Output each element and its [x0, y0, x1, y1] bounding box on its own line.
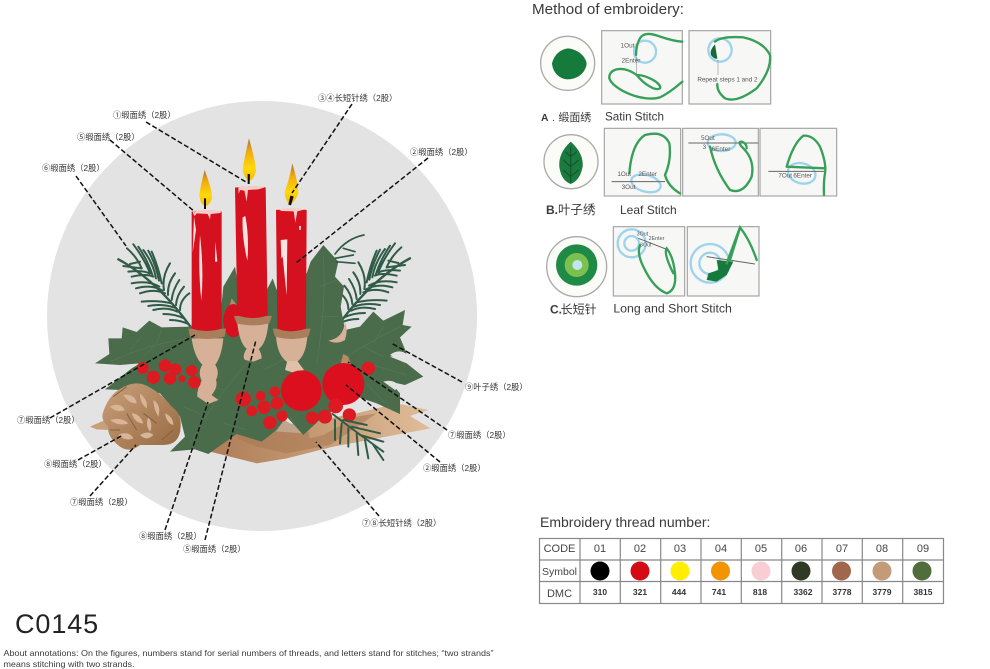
stitch callout labels: ②缎面绣（2股）: [410, 147, 473, 157]
label: satin stitch: Satin Stitch: [605, 111, 664, 124]
candle holder: center: [234, 316, 272, 362]
thread colour table: 3779: [873, 587, 892, 597]
step: long and short stitch 1: 3Out: [637, 231, 649, 237]
label: long and short stitch: [550, 301, 732, 316]
leader lines: [50, 104, 462, 540]
panel: stitch methods A and B: [541, 31, 837, 196]
thread colour table: 741: [712, 587, 726, 597]
step: leaf stitch 1: 3Out: [622, 184, 636, 191]
stitch callout labels: ⑧缎面绣（2股）: [44, 459, 107, 469]
sample: long and short stitch: [547, 237, 607, 297]
step: satin stitch 2: [689, 31, 771, 104]
label: leaf stitch: Leaf Stitch: [620, 203, 677, 217]
thread colour table: 05: [755, 543, 767, 555]
flames and wicks: [199, 138, 298, 209]
thread colour table: 321: [633, 587, 647, 597]
thread colour table: 03: [674, 543, 686, 555]
tan paper base: [90, 403, 431, 463]
stitch callout labels: ⑧缎面绣（2股）: [139, 531, 202, 541]
step: long and short stitch 1: [613, 227, 685, 296]
tan leaf curl: [328, 322, 347, 343]
step: long and short stitch 1: 2Enter: [649, 236, 665, 242]
step: long and short stitch 1: 3Out: [640, 243, 652, 249]
thread colour table: [540, 538, 944, 604]
step: leaf stitch 3: 7Out: [778, 172, 792, 179]
main holly leaves: [95, 245, 423, 454]
step: leaf stitch 3: 6Enter: [793, 172, 812, 179]
label: long and short stitch: Long and Short Stitch: [613, 302, 732, 316]
stitch callout labels: ③④长短针绣（2股）: [318, 93, 397, 103]
step: leaf stitch 3: [760, 128, 837, 196]
label: satin stitch: .: [552, 113, 555, 124]
label: leaf stitch: 叶子绣: [558, 202, 596, 217]
sample: leaf stitch: [544, 135, 598, 189]
stitch callout labels: ⑤缎面绣（2股）: [77, 132, 140, 142]
label: long and short stitch: 长短针: [561, 301, 597, 316]
stitch callout labels: ⑨叶子绣（2股）: [465, 382, 528, 392]
step: leaf stitch 2: 3: [703, 144, 707, 151]
stitch callout labels: ⑦缎面绣（2股）: [70, 497, 133, 507]
label: long and short stitch: C.: [550, 302, 562, 316]
label: satin stitch: [541, 110, 664, 124]
thread colour table: CODE: [544, 543, 575, 555]
step: leaf stitch 1: 1Out: [617, 171, 631, 178]
label: satin stitch: A: [541, 113, 549, 124]
note about annotations: [4, 648, 494, 669]
candle holder: left: [188, 329, 226, 404]
pine cone: [102, 383, 181, 450]
candle holder: right: [273, 329, 311, 373]
stitch callout labels: ②缎面绣（2股）: [423, 463, 486, 473]
thread colour table: 444: [672, 587, 686, 597]
product code: C0145: [15, 609, 99, 639]
thread colour table: 02: [634, 543, 646, 555]
note about annotations: means stitching with two strands.: [4, 659, 134, 669]
label: leaf stitch: [546, 202, 677, 217]
label: leaf stitch: B.: [546, 203, 558, 217]
step: satin stitch 1: [602, 31, 682, 104]
thread colour table: 01: [594, 543, 606, 555]
heading: thread number: Embroidery thread number:: [540, 514, 710, 530]
stitch callout labels: ⑦缎面绣（2股）: [448, 430, 511, 440]
sample: satin stitch: [541, 36, 595, 90]
illustration: advent candles with holly: [90, 138, 431, 463]
step: long and short stitch 2: [687, 227, 759, 296]
thread colour table: 07: [836, 543, 848, 555]
stitch callout labels: ①缎面绣（2股）: [113, 110, 176, 120]
label: satin stitch: 缎面绣: [558, 110, 591, 124]
thread colour table: DMC: [547, 588, 572, 600]
step: satin stitch 1: 2Enter: [622, 57, 640, 64]
heading: method of embroidery: Method of embroidery:: [532, 1, 684, 18]
step: leaf stitch 2: 6Enter: [712, 146, 730, 153]
back ornament: [223, 298, 243, 337]
thread colour table: 09: [917, 543, 929, 555]
thread colour table: 04: [715, 543, 727, 555]
candle: center: [235, 186, 268, 318]
step: leaf stitch 2: [683, 128, 758, 196]
step: satin stitch 2: Repeat steps 1 and 2: [697, 77, 758, 84]
candle: left: [192, 210, 222, 331]
berries: [137, 359, 375, 429]
step: satin stitch 1: 1Out: [621, 43, 635, 50]
stitch callout labels: ⑤缎面绣（2股）: [183, 544, 246, 554]
step: leaf stitch 2: 5Out: [701, 135, 715, 142]
thread colour table: 818: [753, 587, 767, 597]
thread colour table: 310: [593, 587, 607, 597]
thread colour table: 3815: [914, 587, 933, 597]
pine branch: left: [118, 244, 190, 326]
thread colour table: 08: [876, 543, 888, 555]
step: leaf stitch 1: 2Enter: [638, 171, 657, 178]
stitch callout labels: [17, 93, 528, 554]
thread colour table: 3362: [794, 587, 813, 597]
thread colour table: 3778: [833, 587, 852, 597]
note about annotations: About annotations: On the figures, numbers stand for serial numbers of threads, and letters stand for stitches; “two strands”: [4, 648, 494, 658]
step: leaf stitch 1: [604, 128, 681, 196]
pine branch: right: [338, 243, 410, 325]
thread colour table: Symbol: [542, 566, 577, 578]
candle: right: [276, 208, 307, 331]
panel: long and short stitch: [547, 227, 759, 316]
ornaments: [281, 354, 364, 411]
background circle: [47, 101, 477, 531]
stitch callout labels: ⑥缎面绣（2股）: [42, 163, 105, 173]
stitch callout labels: ⑦⑧长短针绣（2股）: [362, 518, 441, 528]
thread colour table: 06: [795, 543, 807, 555]
stitch callout labels: ⑦缎面绣（2股）: [17, 415, 80, 425]
top pine sprig: [335, 235, 364, 263]
pine sprig: lower: [333, 414, 383, 460]
